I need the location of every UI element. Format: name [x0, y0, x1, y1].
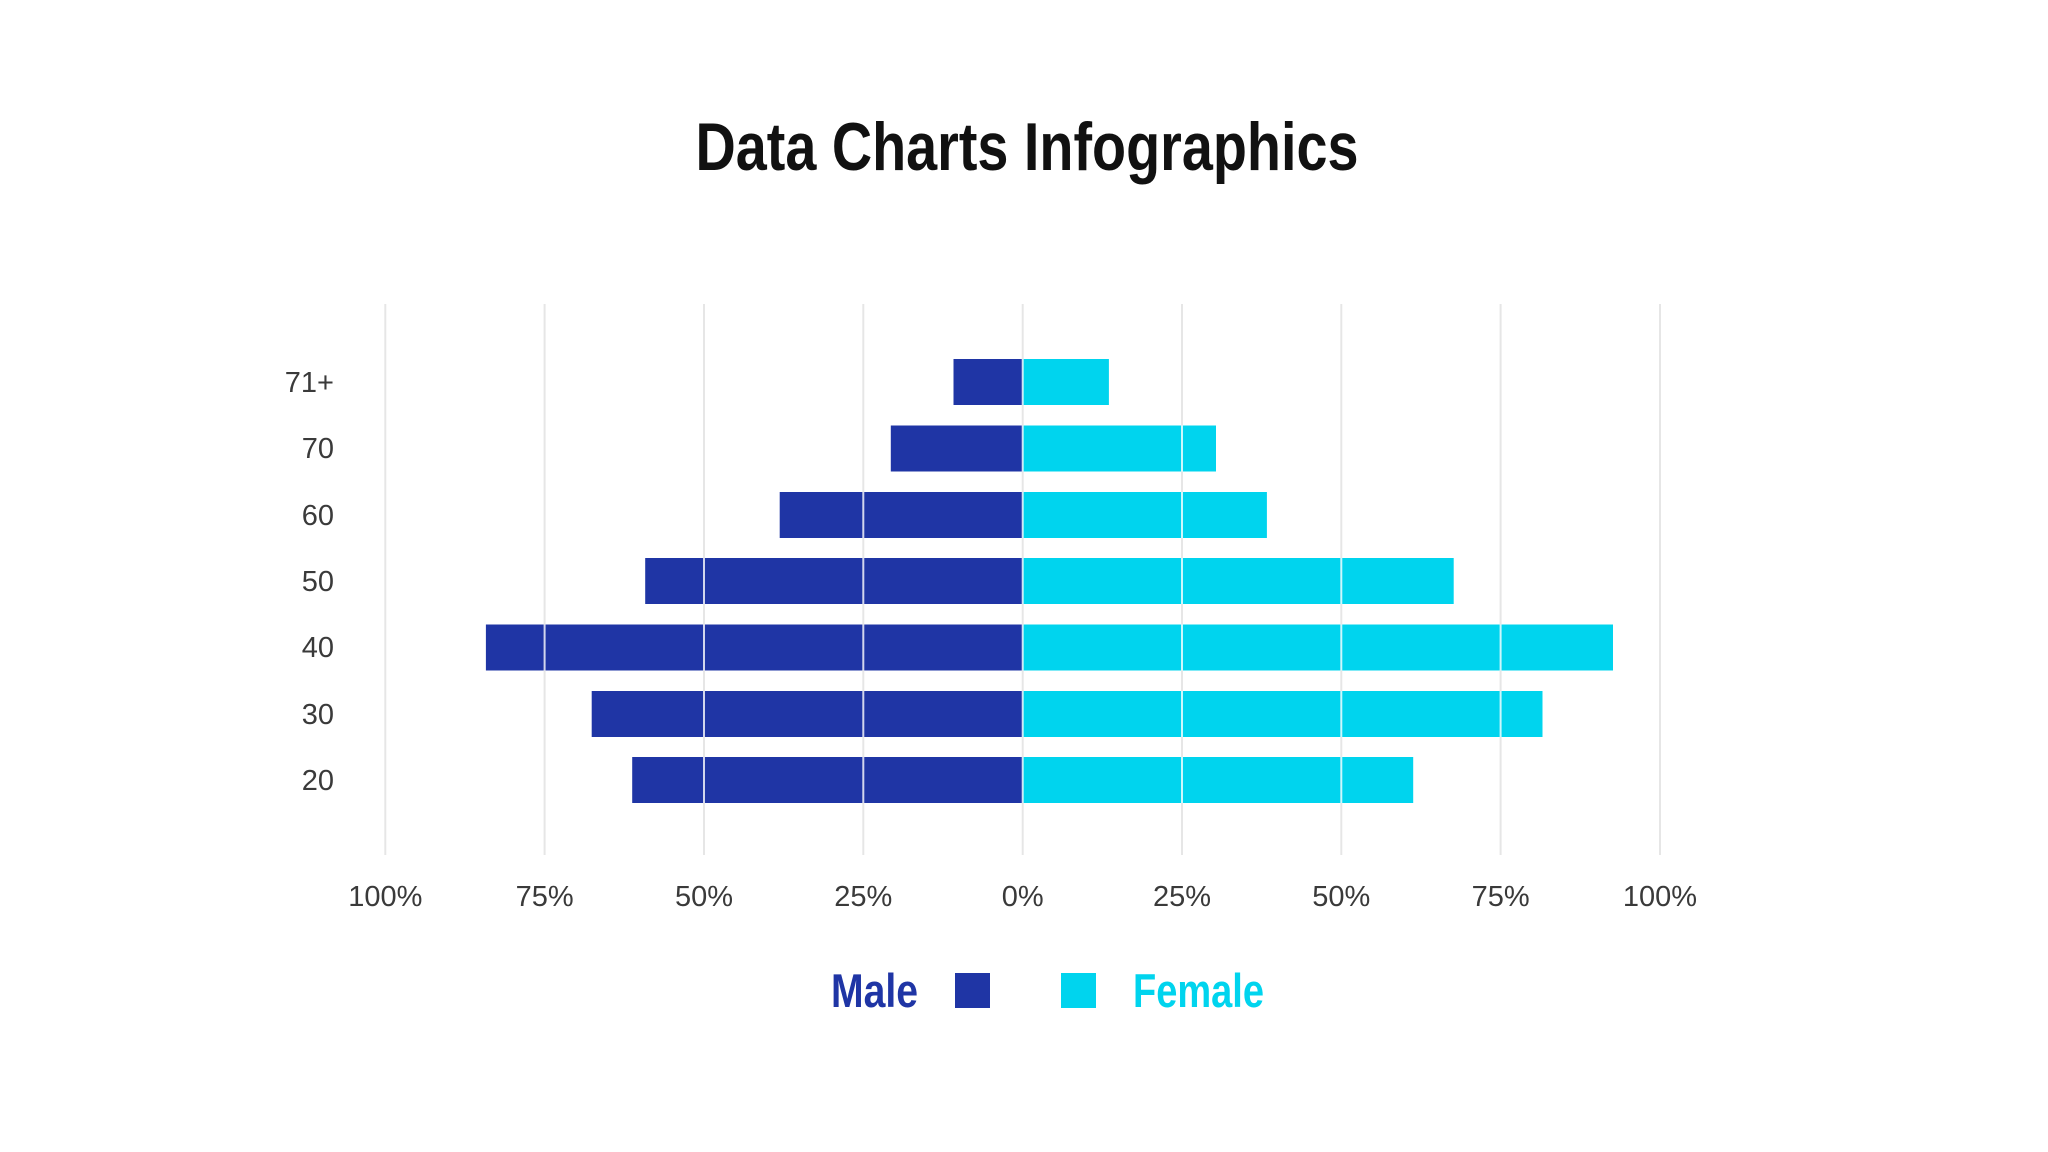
x axis labels: 0%: [1002, 881, 1044, 913]
x axis labels: 25%: [1153, 881, 1211, 913]
legend: [831, 964, 1264, 1017]
y axis labels: 40: [302, 632, 334, 664]
x axis labels: 50%: [675, 881, 733, 913]
x axis labels: 75%: [1472, 881, 1530, 913]
male bars: [486, 359, 1023, 803]
y axis labels: 20: [302, 765, 334, 797]
title: Data Charts Infographics: [696, 109, 1358, 185]
legend: Female: [1133, 964, 1264, 1017]
x axis labels: 100%: [348, 881, 422, 913]
y axis labels: 70: [302, 433, 334, 465]
y axis labels: 50: [302, 566, 334, 598]
y axis labels: 60: [302, 500, 334, 532]
x axis labels: 100%: [1623, 881, 1697, 913]
x axis labels: 75%: [516, 881, 574, 913]
x axis labels: 25%: [834, 881, 892, 913]
chart: population pyramid: [285, 304, 1697, 913]
y axis labels: 30: [302, 699, 334, 731]
y axis labels: 71+: [285, 367, 334, 399]
female bars: [1023, 359, 1613, 803]
x axis labels: 50%: [1312, 881, 1370, 913]
x axis labels: [348, 881, 1697, 913]
legend: Male: [831, 964, 918, 1017]
y axis labels: [285, 367, 334, 797]
